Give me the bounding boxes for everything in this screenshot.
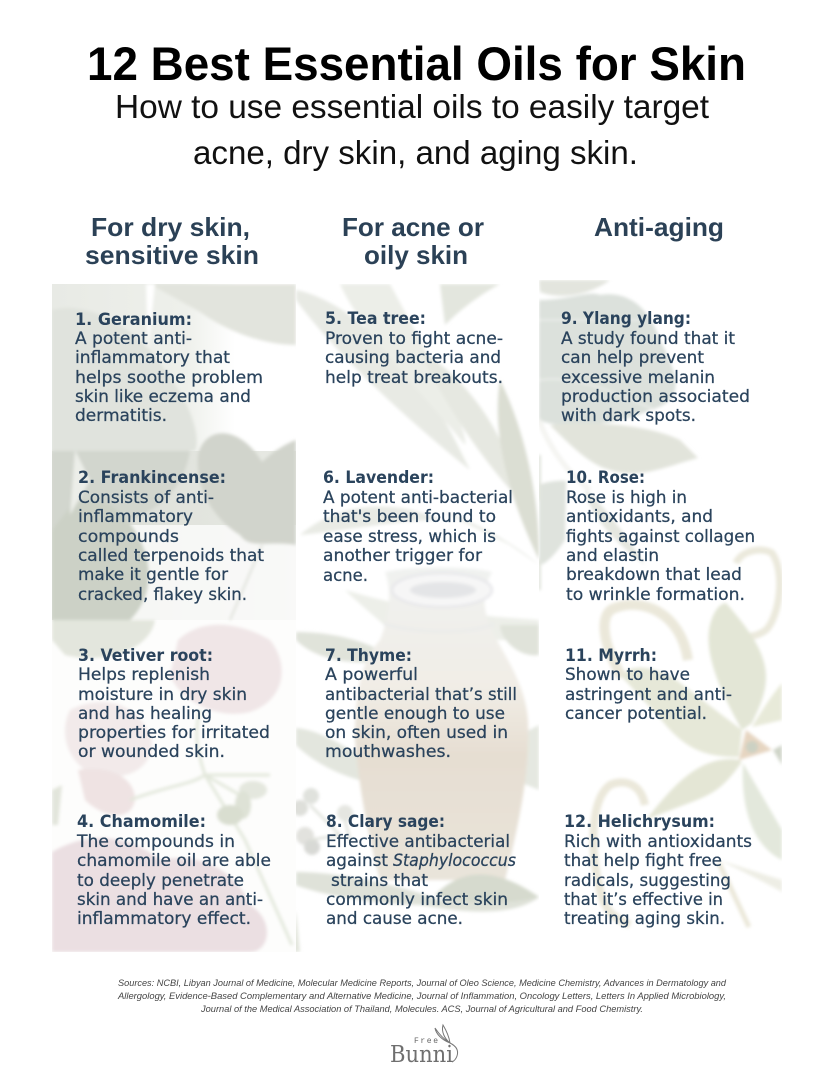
entry 12: Helichrysum: that it’s effective in — [564, 890, 723, 910]
entry 3: Vetiver root — [78, 646, 270, 762]
entry 1: Geranium: skin like eczema and — [75, 387, 251, 407]
entry 7: Thyme: mouthwashes. — [325, 742, 451, 762]
title: 12 Best Essential Oils for Skin — [87, 37, 746, 90]
entry 4: Chamomile: The compounds in — [76, 832, 235, 852]
entry 5: Tea tree: causing bacteria and — [325, 348, 501, 368]
entry 8: Clary sage: commonly infect skin — [326, 890, 508, 910]
sources: Journal of the Medical Association of Thailand, Molecules. ACS, Journal of Agricultural and Food Chemistry. — [200, 1004, 643, 1014]
column heading: dry skin: sensitive skin — [85, 240, 259, 270]
entry 4: Chamomile: chamomile oil are able — [77, 851, 271, 871]
column heading: acne: oily skin — [364, 240, 468, 270]
entry 1: Geranium: dermatitis. — [75, 406, 167, 426]
entry 6: Lavender: another trigger for — [323, 546, 482, 566]
sources — [117, 978, 727, 1014]
entry 1: Geranium: 1. Geranium: — [75, 310, 192, 330]
entry 7: Thyme: gentle enough to use — [325, 704, 505, 724]
entry 5: Tea tree: help treat breakouts. — [325, 368, 503, 388]
entry 12: Helichrysum: Rich with antioxidants — [564, 832, 752, 852]
logo: Free Bunni: Free — [414, 1037, 438, 1046]
entry 8: Clary sage: and cause acne. — [326, 909, 463, 929]
entry 11: Myrrh: 11. Myrrh: — [565, 646, 657, 666]
entry 3: Vetiver root: or wounded skin. — [78, 742, 225, 762]
entry 9: Ylang ylang: production associated — [561, 387, 750, 407]
column heading: acne: For acne or — [342, 212, 484, 242]
panel: anti-aging — [561, 309, 755, 929]
entry 1: Geranium: inflammatory that — [75, 348, 230, 368]
panel: dry, sensitive skin — [75, 310, 271, 929]
background illustration: geranium column — [52, 284, 296, 952]
entry 11: Myrrh: cancer potential. — [565, 704, 707, 724]
subtitle — [115, 88, 709, 171]
entry 6: Lavender: 6. Lavender: — [323, 468, 434, 488]
entry 12: Helichrysum: radicals, suggesting — [564, 871, 731, 891]
background illustration: tea tree leaves and bottle column — [292, 284, 539, 952]
entry 6: Lavender: acne. — [323, 566, 368, 586]
entry 8: Clary sage: strains that — [331, 871, 428, 891]
logo: Free Bunni: Bunni — [390, 1042, 453, 1068]
entry 1: Geranium: helps soothe problem — [75, 368, 263, 388]
sources: Allergology, Evidence-Based Complementary and Alternative Medicine, Journal of Inflammation, Oncology Letters, Letters In Applied Microbiology, — [117, 991, 726, 1001]
entry 8: Clary sage: 8. Clary sage: — [326, 812, 445, 832]
entry 1: Geranium — [75, 310, 263, 426]
entry 10: Rose: antioxidants, and — [566, 507, 713, 527]
entry 10: Rose: and elastin — [566, 546, 659, 566]
entry 9: Ylang ylang: can help prevent — [561, 348, 704, 368]
entry 2: Frankincense — [78, 468, 264, 605]
background illustration: ylang ylang leaves and flower column — [539, 280, 782, 927]
entry 10: Rose: fights against collagen — [566, 527, 755, 547]
entry 10: Rose — [566, 468, 755, 605]
entry 9: Ylang ylang: 9. Ylang ylang: — [561, 309, 691, 329]
entry 12: Helichrysum: 12. Helichrysum: — [564, 812, 715, 832]
entry 7: Thyme: on skin, often used in — [325, 723, 508, 743]
entry 10: Rose: Rose is high in — [566, 488, 687, 508]
entry 12: Helichrysum: treating aging skin. — [564, 909, 725, 929]
logo: Free Bunni — [390, 1025, 458, 1068]
entry 4: Chamomile: 4. Chamomile: — [77, 812, 206, 832]
entry 2: Frankincense: Consists of anti- — [78, 488, 214, 508]
entry 2: Frankincense: make it gentle for — [78, 565, 228, 585]
subtitle: acne, dry skin, and aging skin. — [193, 134, 638, 171]
entry 4: Chamomile: to deeply penetrate — [77, 871, 244, 891]
entry 10: Rose: breakdown that lead — [566, 565, 742, 585]
entry 1: Geranium: A potent anti- — [75, 329, 192, 349]
sources: Sources: NCBI, Libyan Journal of Medicine, Molecular Medicine Reports, Journal of Oleo Science, Medicine Chemistry, Advances in Dermatology and — [118, 978, 727, 988]
entry 5: Tea tree: Proven to fight acne- — [325, 329, 503, 349]
entry 9: Ylang ylang: with dark spots. — [561, 406, 696, 426]
column heading: anti-aging: Anti-aging — [594, 212, 724, 242]
entry 8: Clary sage: Effective antibacterial — [326, 832, 510, 852]
petals — [708, 603, 766, 730]
ribbons — [727, 550, 780, 636]
entry 7: Thyme: 7. Thyme: — [325, 646, 412, 666]
entry 11: Myrrh — [565, 646, 732, 724]
entry 2: Frankincense: 2. Frankincense: — [78, 468, 226, 488]
entry 3: Vetiver root: 3. Vetiver root: — [78, 646, 213, 666]
subtitle: How to use essential oils to easily target — [115, 88, 709, 125]
column heading: dry skin: For dry skin, — [91, 212, 250, 242]
icon: rabbit ears — [435, 1025, 458, 1062]
entry 3: Vetiver root: properties for irritated — [78, 723, 270, 743]
column heading: dry skin — [85, 212, 259, 270]
column heading: acne — [342, 212, 484, 270]
entry 3: Vetiver root: and has healing — [78, 704, 212, 724]
entry 6: Lavender: A potent anti-bacterial — [323, 488, 513, 508]
entry 7: Thyme — [325, 646, 517, 762]
entry 12: Helichrysum: that help fight free — [564, 851, 722, 871]
entry 6: Lavender: ease stress, which is — [323, 527, 496, 547]
entry 3: Vetiver root: moisture in dry skin — [78, 685, 247, 705]
entry 2: Frankincense: inflammatory — [78, 507, 193, 527]
entry 9: Ylang ylang: A study found that it — [561, 329, 735, 349]
entry 8: Clary sage — [326, 812, 516, 929]
entry 8: Clary sage: Staphylococcus — [393, 851, 516, 871]
entry 4: Chamomile: inflammatory effect. — [77, 909, 251, 929]
entry 11: Myrrh: astringent and anti- — [565, 685, 732, 705]
entry 5: Tea tree — [325, 309, 503, 388]
entry 6: Lavender: that's been found to — [323, 507, 496, 527]
entry 2: Frankincense: compounds — [78, 527, 179, 547]
panel: acne or oily skin — [323, 309, 517, 929]
entry 2: Frankincense: cracked, flakey skin. — [78, 585, 247, 605]
entry 9: Ylang ylang: excessive melanin — [561, 368, 715, 388]
entry 12: Helichrysum — [564, 812, 752, 929]
entry 3: Vetiver root: Helps replenish — [78, 665, 210, 685]
entry 6: Lavender — [323, 468, 513, 586]
entry 4: Chamomile: skin and have an anti- — [77, 890, 263, 910]
entry 11: Myrrh: Shown to have — [565, 665, 690, 685]
entry 10: Rose: 10. Rose: — [566, 468, 645, 488]
entry 7: Thyme: A powerful — [325, 665, 418, 685]
entry 9: Ylang ylang — [561, 309, 750, 426]
entry 4: Chamomile — [76, 812, 271, 929]
entry 8: Clary sage: against — [326, 851, 388, 871]
entry 2: Frankincense: called terpenoids that — [78, 546, 264, 566]
entry 5: Tea tree: 5. Tea tree: — [325, 309, 426, 329]
entry 10: Rose: to wrinkle formation. — [566, 585, 745, 605]
entry 7: Thyme: antibacterial that’s still — [325, 685, 517, 705]
